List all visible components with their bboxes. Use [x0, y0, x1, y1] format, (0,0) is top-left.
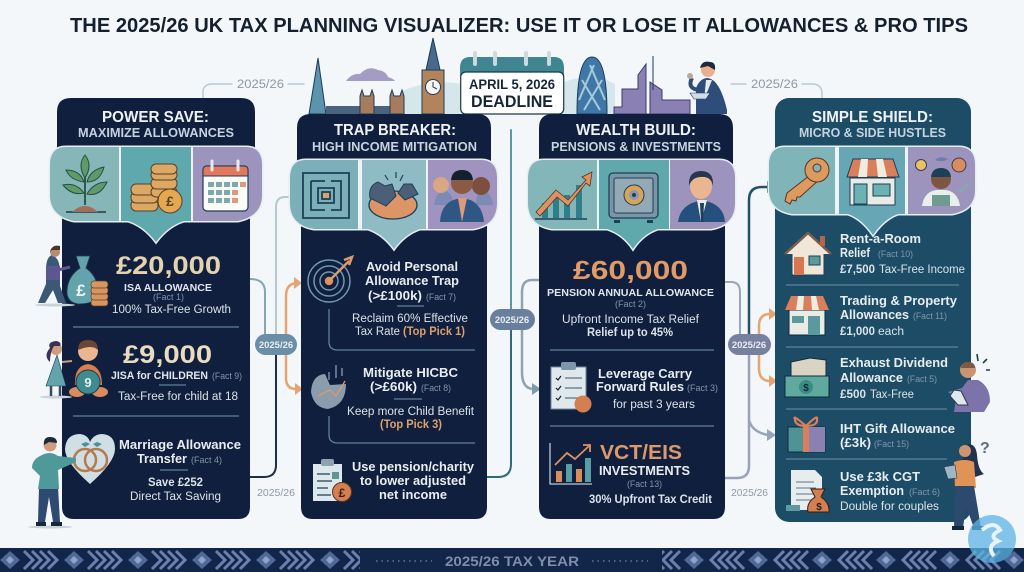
heading: HIGH INCOME MITIGATION	[312, 140, 477, 154]
item: trading allowance: Allowances	[840, 308, 909, 322]
item: carry forward: (Fact 3)	[687, 383, 718, 393]
item: dividend allowance: (Fact 5)	[907, 374, 937, 384]
heading: SIMPLE SHIELD:	[812, 109, 933, 126]
stat: ISA allowance: 100% Tax-Free Growth	[112, 304, 231, 316]
item: pension or charity: to lower adjusted	[360, 474, 466, 488]
item: CGT exemption: Double for couples	[840, 501, 939, 513]
item: VCT and EIS: VCT/EIS	[600, 442, 682, 464]
item: personal allowance trap: Avoid Personal	[366, 260, 458, 274]
item: IHT gift: (Fact 15)	[874, 439, 909, 449]
connector: top left year label: 2025/26	[237, 79, 284, 91]
item: personal allowance trap: Reclaim 60% Effective	[352, 313, 468, 325]
icon: children with JISA ball: 9	[84, 375, 92, 390]
item: CGT exemption: Exemption	[840, 484, 904, 498]
stat: JISA for children: (Fact 9)	[212, 371, 242, 381]
item: dividend allowance: Allowance	[840, 371, 903, 385]
icon: key	[785, 158, 829, 204]
icon strip	[769, 147, 975, 237]
item: trading allowance: (Fact 11)	[913, 311, 947, 321]
item: pension or charity: net income	[379, 488, 447, 502]
heading: PENSIONS & INVESTMENTS	[551, 140, 721, 154]
item: carry forward	[596, 367, 718, 411]
heading	[551, 122, 721, 154]
stat: ISA allowance: £20,000	[116, 252, 221, 280]
icon: clipboard with coin	[313, 459, 352, 502]
connector: panel 2 to panel 3: 2025/26	[495, 315, 529, 326]
icon: house	[785, 233, 831, 275]
icon: presenter with tablet	[687, 62, 727, 114]
item: CGT exemption: Use £3k CGT	[840, 470, 920, 484]
icon: woman with tablet	[944, 440, 990, 530]
stat: JISA for children	[111, 341, 242, 403]
item: dividend allowance: Exhaust Dividend	[840, 356, 948, 370]
stat: pension annual allowance: Relief up to 45%	[587, 327, 673, 339]
panel: power save	[50, 98, 262, 519]
stat: JISA for children: £9,000	[123, 341, 212, 369]
icon: pound coins	[131, 164, 182, 213]
item: rent-a-room: Rent-a-Room	[840, 232, 921, 246]
stat: pension annual allowance: (Fact 2)	[615, 299, 646, 309]
item: VCT and EIS: 30% Upfront Tax Credit	[589, 494, 712, 506]
stat: marriage allowance: Direct Tax Saving	[130, 491, 221, 503]
icon: document with money bag: $	[816, 502, 822, 513]
item: VCT and EIS: INVESTMENTS	[599, 463, 690, 478]
icon: cash: $	[803, 383, 809, 394]
item: pension or charity	[352, 460, 474, 502]
title: THE 2025/26 UK TAX PLANNING VISUALIZER: USE IT OR LOSE IT ALLOWANCES & PRO TIPS	[70, 15, 968, 37]
calendar: deadline	[460, 53, 564, 114]
icon: broken trap	[369, 172, 418, 219]
icon: maze	[303, 173, 349, 218]
item: trading allowance: Trading & Property	[840, 294, 957, 308]
stat: pension annual allowance: £60,000	[573, 255, 688, 285]
item: CGT exemption	[840, 470, 940, 513]
stat: ISA allowance	[112, 252, 231, 316]
item: carry forward: Forward Rules	[596, 380, 684, 394]
item: trading allowance	[840, 294, 957, 338]
item: dividend allowance: Tax-Free	[870, 389, 914, 401]
icon: growth arrow	[535, 172, 592, 219]
item: trading allowance: each	[878, 326, 904, 338]
icon: people	[433, 170, 493, 222]
icon: side hustler	[916, 157, 969, 206]
item: personal allowance trap	[329, 260, 475, 350]
stat: marriage allowance: (Fact 4)	[191, 455, 222, 465]
item: HICBC: (Top Pick 3)	[380, 419, 442, 431]
watermark badge	[968, 515, 1016, 563]
icon: money bag with woman	[35, 246, 108, 306]
heading: MICRO & SIDE HUSTLES	[799, 126, 946, 140]
item: rent-a-room: Tax-Free Income	[879, 264, 965, 276]
skyline: London landmarks	[309, 38, 690, 114]
heading: POWER SAVE:	[102, 109, 209, 126]
heading: WEALTH BUILD:	[576, 122, 696, 139]
item: HICBC: Keep more Child Benefit	[347, 406, 475, 418]
stat: marriage allowance	[119, 438, 241, 503]
icon: gift	[788, 418, 825, 452]
connector: panel 3 to panel 4: 2025/26	[731, 487, 768, 499]
icon strip	[528, 160, 735, 255]
item: trading allowance: £1,000	[840, 326, 875, 338]
stat: ISA allowance: (Fact 1)	[153, 292, 184, 302]
connector: panel 3 to panel 4	[725, 181, 777, 499]
item: dividend allowance	[840, 356, 948, 401]
icon strip	[50, 147, 262, 242]
connector: panel 3 to panel 4: 2025/26	[732, 340, 766, 351]
stat: ISA allowance: ISA ALLOWANCE	[124, 283, 212, 294]
item: carry forward: for past 3 years	[613, 399, 695, 411]
icon: bar chart	[550, 443, 592, 484]
icon: man with tablet	[948, 354, 990, 412]
connector: panel 1 to panel 2: 2025/26	[257, 487, 295, 499]
item: HICBC	[329, 366, 475, 443]
item: personal allowance trap: (Top Pick 1)	[403, 326, 465, 338]
item: rent-a-room: £7,500	[840, 264, 875, 276]
item: rent-a-room	[840, 232, 965, 276]
item: rent-a-room: Relief	[840, 246, 871, 260]
connector: top left year label	[203, 79, 304, 98]
icon: cash	[785, 358, 829, 397]
stat: pension annual allowance	[547, 255, 714, 339]
item: personal allowance trap: Allowance Trap	[365, 274, 459, 288]
icon: money bag with woman: £	[76, 281, 86, 300]
icon: checklist	[551, 362, 592, 412]
item: rent-a-room: (Fact 10)	[878, 249, 913, 259]
heading: TRAP BREAKER:	[334, 122, 456, 139]
connector: panel 1 to panel 2	[250, 197, 303, 499]
icon: heart with rings	[65, 434, 115, 484]
stat: JISA for children: Tax-Free for child at 18	[118, 391, 238, 403]
icon: children with JISA ball	[40, 340, 108, 398]
icon: man pointing	[28, 437, 76, 528]
stat: pension annual allowance: Upfront Income Tax Relief	[562, 314, 700, 326]
icon: document with money bag	[786, 470, 829, 513]
item: dividend allowance: £500	[840, 389, 866, 401]
footer band	[0, 548, 1024, 572]
heading	[78, 109, 234, 140]
icon: seedling	[63, 155, 107, 212]
icon: storefront	[847, 159, 899, 205]
icon: businessman	[678, 171, 725, 222]
item: IHT gift	[840, 422, 955, 450]
heading	[312, 122, 477, 154]
connector: top right year label: 2025/26	[751, 79, 798, 91]
item: carry forward: Leverage Carry	[598, 367, 692, 381]
heading: MAXIMIZE ALLOWANCES	[78, 126, 234, 140]
icon: shop	[785, 296, 829, 335]
item: HICBC: Mitigate HICBC	[363, 366, 458, 380]
icon: target	[308, 257, 352, 302]
icon: pound coins: £	[166, 193, 174, 209]
icon: snapped trap	[311, 365, 346, 409]
calendar: deadline: DEADLINE	[471, 92, 553, 111]
panel: simple shield	[769, 98, 975, 522]
stat: pension annual allowance: PENSION ANNUAL ALLOWANCE	[547, 287, 714, 299]
item: IHT gift: (£3k)	[840, 436, 871, 450]
calendar: deadline: APRIL 5, 2026	[469, 77, 555, 92]
item: HICBC: (Fact 8)	[421, 383, 451, 393]
item: IHT gift: IHT Gift Allowance	[840, 422, 955, 436]
connector: top right year label	[731, 79, 822, 98]
icon: safe	[609, 173, 658, 223]
item: HICBC: (>£60k)	[370, 380, 417, 394]
item: personal allowance trap: (>£100k)	[368, 289, 422, 303]
connector: panel 2 to panel 3	[487, 130, 541, 477]
icon: calendar	[203, 161, 248, 211]
stat: marriage allowance: Marriage Allowance	[119, 438, 241, 452]
stat: marriage allowance: Transfer	[137, 452, 187, 466]
item: pension or charity: Use pension/charity	[352, 460, 474, 474]
item: VCT and EIS: (Fact 13)	[627, 479, 662, 489]
item: personal allowance trap: Tax Rate	[355, 326, 400, 338]
stat: marriage allowance: Save £252	[148, 477, 203, 489]
item: CGT exemption: (Fact 6)	[909, 487, 940, 497]
icon: clipboard with coin: £	[339, 486, 346, 500]
item: personal allowance trap: (Fact 7)	[426, 292, 456, 302]
stat: JISA for children: JISA for CHILDREN	[111, 370, 208, 382]
item: VCT and EIS	[589, 442, 712, 506]
icon: woman with tablet: ?	[980, 440, 990, 457]
connector: panel 1 to panel 2: 2025/26	[259, 340, 293, 351]
footer band: 2025/26 TAX YEAR	[445, 553, 579, 569]
heading	[799, 109, 946, 140]
icon strip	[290, 160, 497, 255]
